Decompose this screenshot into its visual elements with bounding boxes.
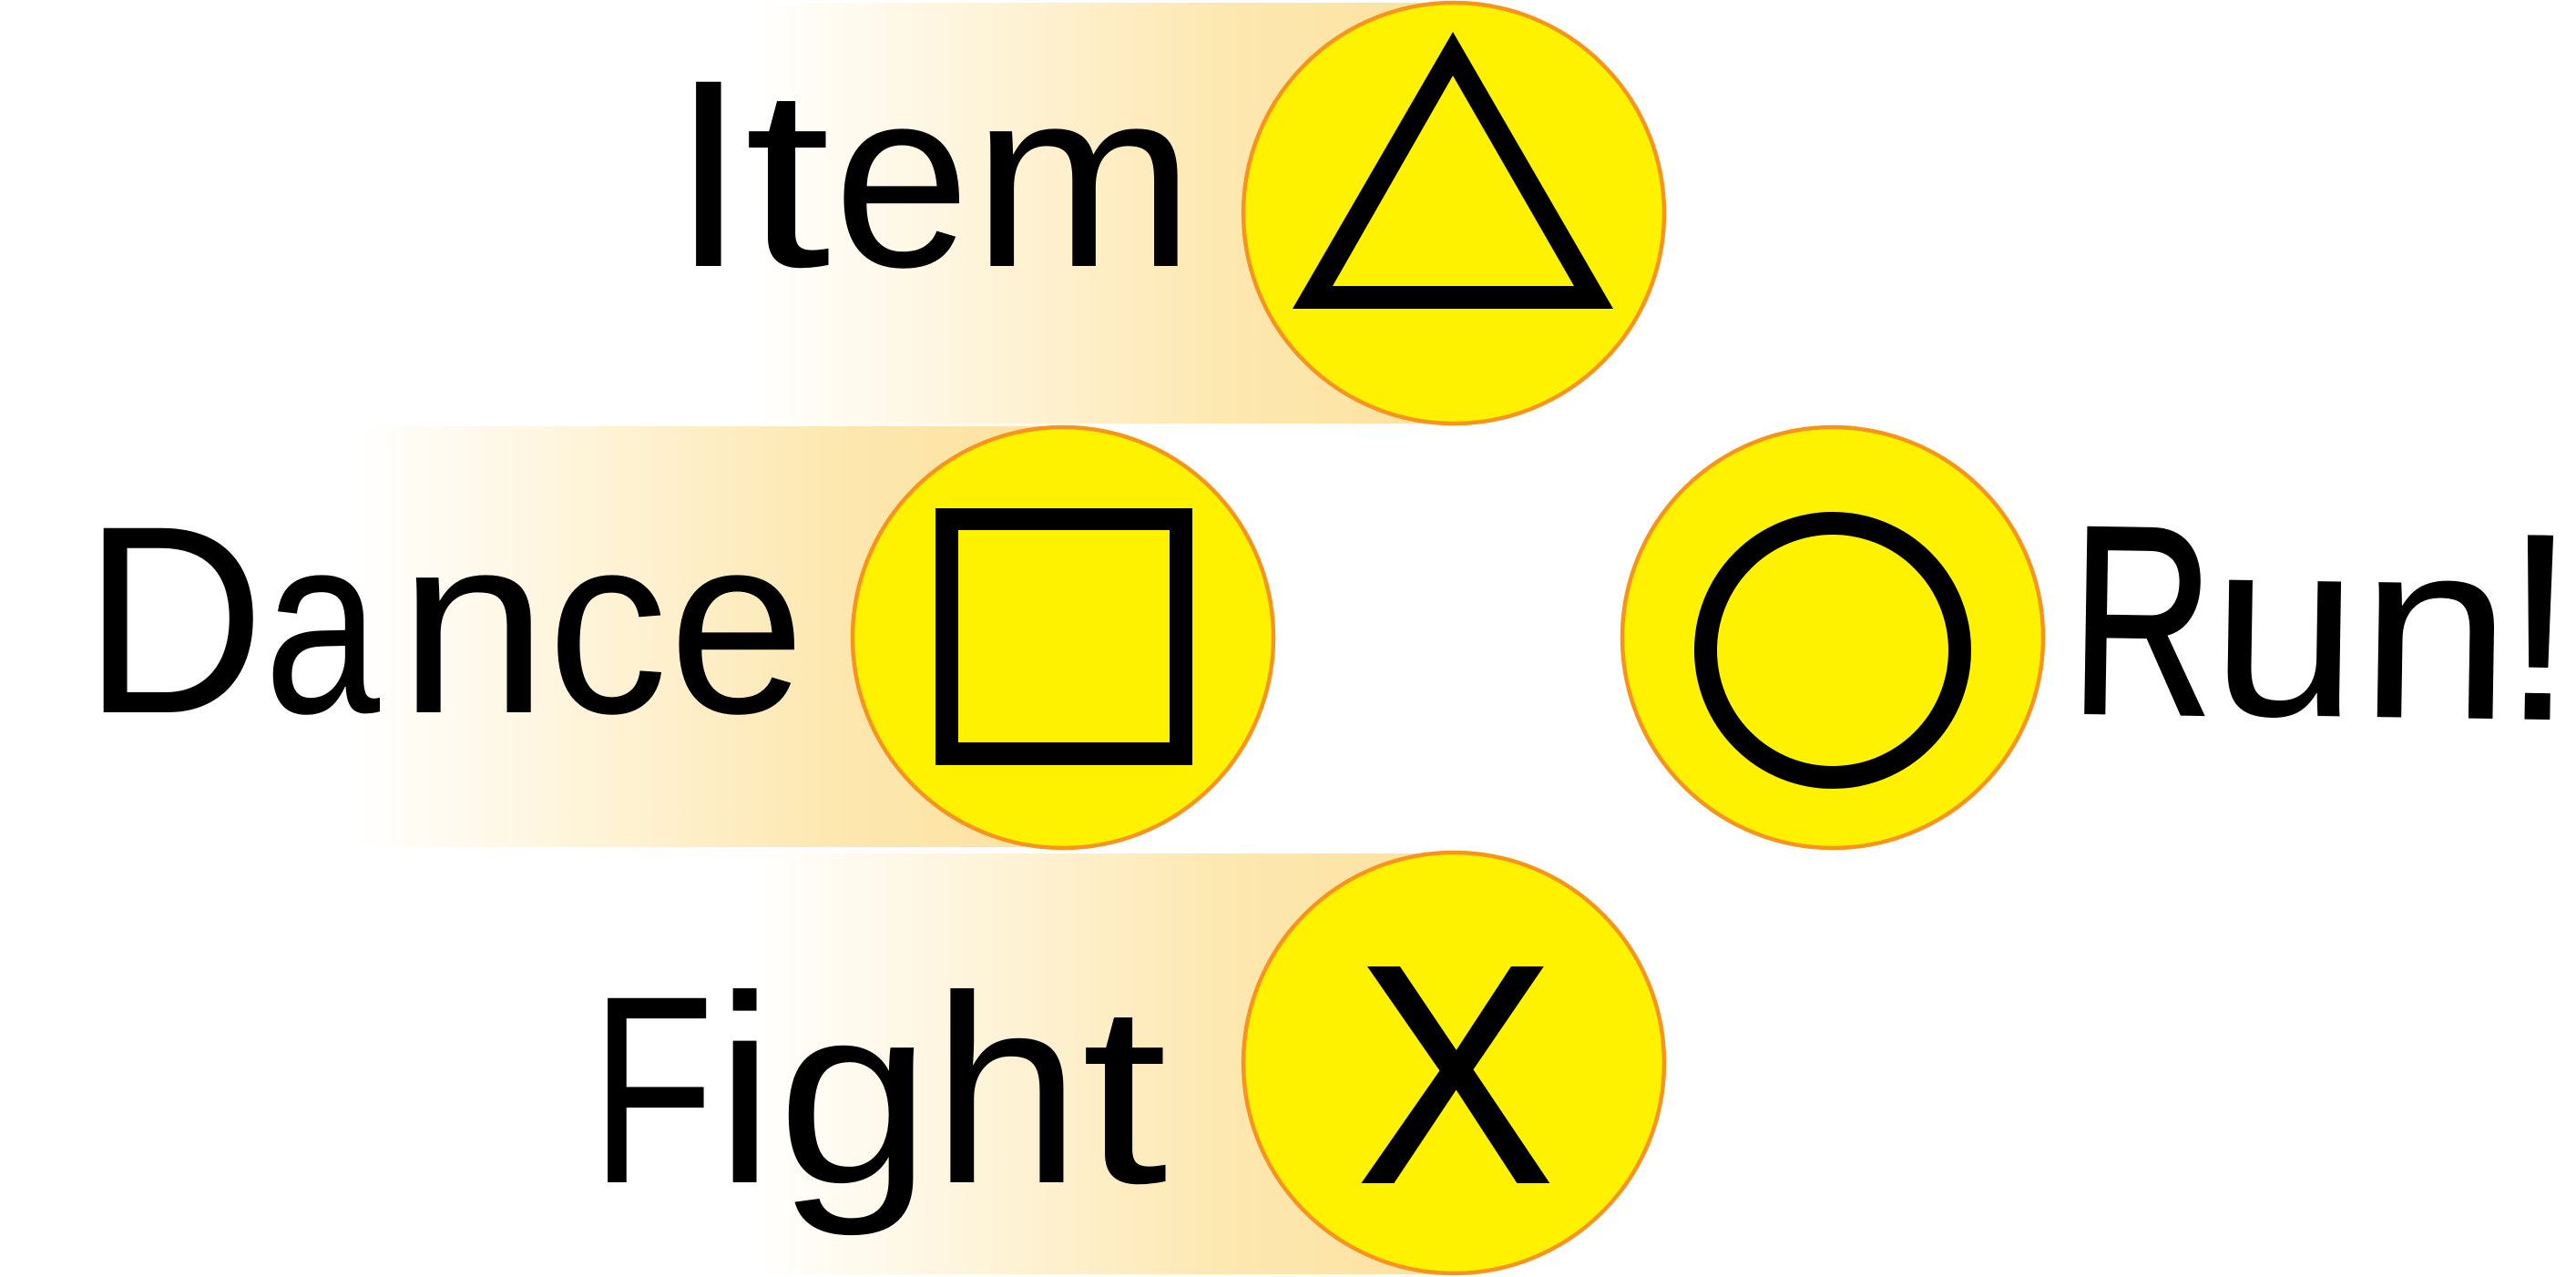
label: Item: t <box>744 36 832 321</box>
button circle: Fight <box>1243 853 1664 1273</box>
panel: Dance button <box>83 426 1273 848</box>
label: Fight: i <box>715 941 774 1240</box>
label: Item: e <box>833 36 970 321</box>
label: Dance: c <box>547 483 668 767</box>
label: Item: I <box>671 25 746 323</box>
panel: Item button <box>671 3 1664 424</box>
icon: X: X <box>1356 899 1554 1249</box>
button circle: Item <box>1243 3 1664 424</box>
icon: circle <box>1705 523 1960 778</box>
label: Dance: D <box>83 471 265 770</box>
label: Fight: F <box>591 941 714 1240</box>
label: Item: m <box>972 36 1195 321</box>
gradient band: Fight <box>756 853 1454 1274</box>
label: Dance: e <box>669 483 805 767</box>
icon: square <box>935 508 1192 765</box>
label: Run!: n <box>2357 487 2514 773</box>
button circle: Dance <box>853 427 1273 848</box>
icon: triangle <box>1293 32 1613 309</box>
label: Run!: u <box>2209 485 2361 771</box>
label: Fight: g <box>777 953 932 1238</box>
panel: Run button <box>1622 427 2576 848</box>
label: Fight: t <box>1081 953 1169 1237</box>
gradient band: Item <box>756 3 1454 424</box>
label: Dance: a <box>264 483 381 767</box>
button circle: Run <box>1622 427 2043 848</box>
label: Run!: R <box>2069 471 2215 771</box>
panel: Fight button <box>591 853 1664 1274</box>
label: Dance: n <box>398 483 548 767</box>
gradient band: Dance <box>355 426 1063 847</box>
label: Fight: h <box>932 941 1081 1240</box>
